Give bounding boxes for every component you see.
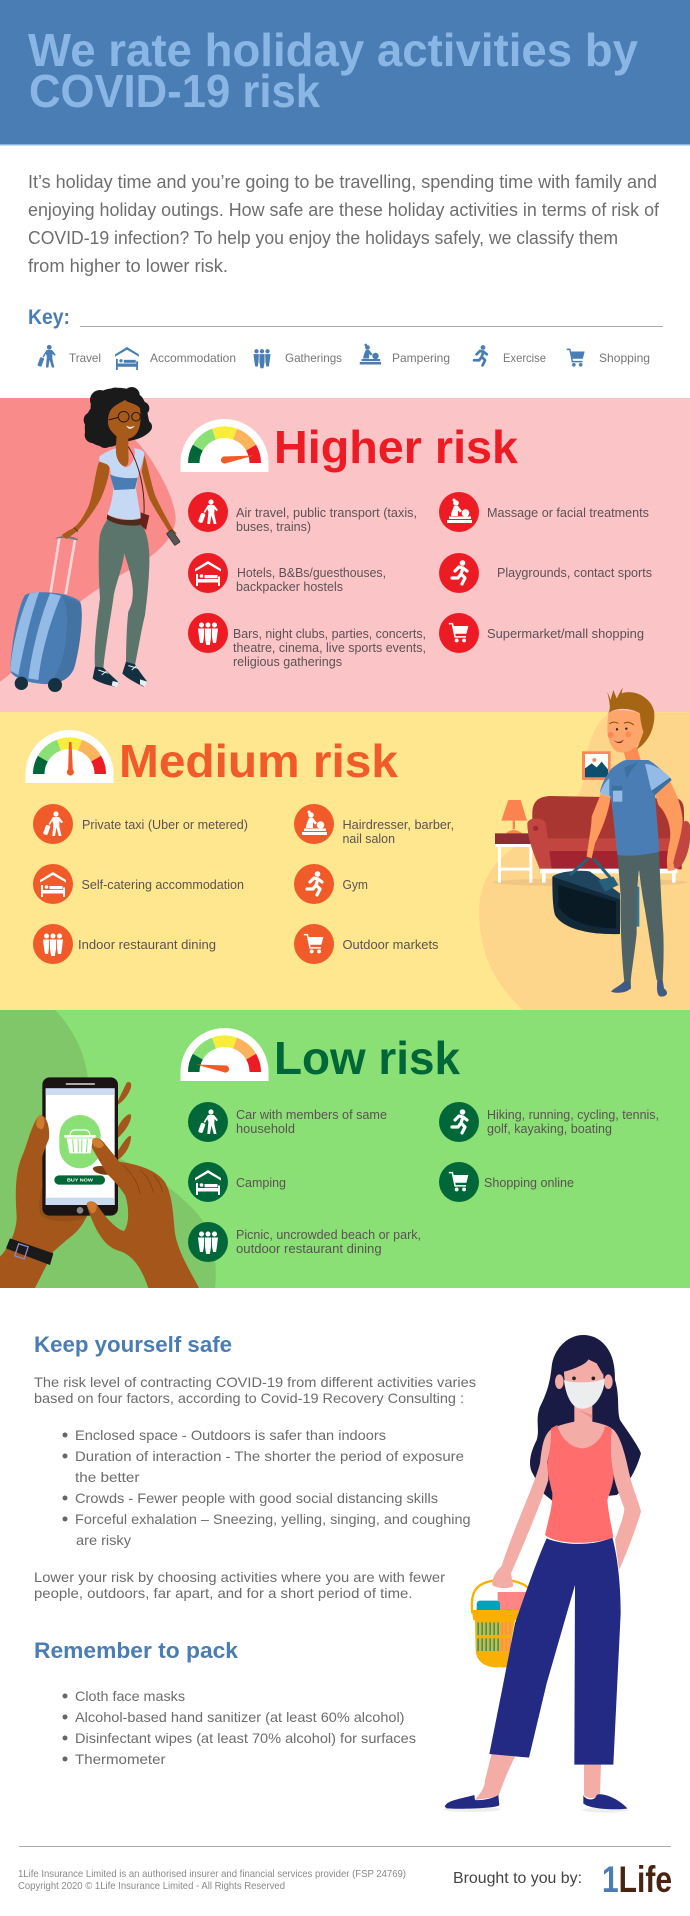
heading: low risk: Low risk (274, 1032, 460, 1084)
bullet list: risk factors: Forceful exhalation – Sneezing, yelling, singing, and coughing (75, 1511, 470, 1527)
key: gatherings (254, 349, 342, 368)
item: gym (294, 864, 368, 904)
item: shopping online (439, 1162, 574, 1202)
illustration: man with bag and sofa (479, 687, 690, 1010)
paragraph: risk factors intro (34, 1374, 476, 1406)
heading: keep yourself safe: Keep yourself safe (34, 1332, 232, 1357)
key: exercise (474, 345, 546, 365)
item: hairdresser: Hairdresser, barber, (342, 818, 454, 832)
bullet list: packing: Cloth face masks (75, 1688, 185, 1704)
gauge: low risk (180, 1028, 268, 1081)
intro paragraph: COVID-19 infection? To help you enjoy the holidays safely, we classify them (28, 228, 618, 248)
key: accommodation (115, 347, 236, 370)
paragraph: lower your risk (34, 1569, 445, 1601)
key: travel (37, 345, 101, 368)
header banner (0, 0, 690, 146)
phone button label: BUY NOW (67, 1178, 93, 1184)
item: self-catering: Self-catering accommodation (82, 878, 244, 892)
key: accommodation: Accommodation (150, 351, 236, 365)
item: air travel: buses, trains) (236, 520, 311, 534)
item: indoor dining: Indoor restaurant dining (78, 938, 216, 952)
item: hairdresser (294, 804, 454, 846)
bullet list: risk factors: the better (75, 1469, 140, 1485)
heading: remember to pack: Remember to pack (34, 1638, 239, 1663)
gauge: higher risk (180, 419, 268, 472)
item: shopping online: Shopping online (484, 1176, 574, 1190)
item: picnic: Picnic, uncrowded beach or park, (236, 1228, 421, 1242)
item: private taxi (33, 804, 248, 844)
item: camping (188, 1162, 286, 1202)
title: We rate holiday activities by (28, 24, 638, 76)
footer (18, 1846, 672, 1900)
item: bars: Bars, night clubs, parties, concerts, (233, 627, 426, 641)
legal text: Copyright 2020 © 1Life Insurance Limited - All Rights Reserved (18, 1880, 285, 1892)
title: COVID-19 risk (29, 65, 320, 117)
item: camping: Camping (236, 1176, 286, 1190)
intro paragraph: It’s holiday time and you’re going to be travelling, spending time with family and (28, 172, 657, 192)
key (28, 306, 663, 370)
item: supermarket (439, 613, 644, 653)
title (28, 24, 638, 117)
item: hotels: Hotels, B&Bs/guesthouses, (237, 566, 386, 580)
panel: medium risk (0, 687, 690, 1010)
bullet list: risk factors: Duration of interaction - The shorter the period of exposure (75, 1448, 464, 1464)
paragraph: risk factors intro: The risk level of contracting COVID-19 from different activities varies (34, 1374, 476, 1390)
bullet list: risk factors: Enclosed space - Outdoors is safer than indoors (75, 1427, 386, 1443)
paragraph: risk factors intro: based on four factors, according to Covid-19 Recovery Consulting : (34, 1390, 464, 1406)
key: shopping (567, 349, 650, 367)
legal text (18, 1868, 406, 1892)
item: hotels (188, 553, 386, 594)
item: hiking (439, 1102, 659, 1142)
key heading: Key: (28, 306, 70, 329)
item: outdoor markets: Outdoor markets (342, 938, 438, 952)
item: bars: theatre, cinema, live sports events, (233, 641, 426, 655)
intro paragraph (28, 172, 660, 276)
item: hairdresser: nail salon (342, 832, 395, 846)
panel: higher risk (0, 387, 690, 712)
item: private taxi: Private taxi (Uber or metered) (82, 818, 248, 832)
bullet list: packing: Disinfectant wipes (at least 70% alcohol) for surfaces (75, 1730, 416, 1746)
item: air travel (188, 492, 417, 534)
key: gatherings: Gatherings (285, 351, 342, 365)
bullet list: risk factors (62, 1427, 470, 1548)
bullet list: risk factors: Crowds - Fewer people with good social distancing skills (75, 1490, 438, 1506)
item: indoor dining (33, 924, 216, 964)
illustration: woman with mask and basket (443, 1335, 641, 1813)
paragraph: lower your risk: Lower your risk by choosing activities where you are with fewer (34, 1569, 445, 1585)
key: travel: Travel (69, 351, 101, 365)
bullet list: packing (62, 1688, 416, 1767)
key: pampering (360, 344, 450, 365)
item: car: Car with members of same (236, 1108, 387, 1122)
key: pampering: Pampering (392, 351, 450, 365)
item: hiking: Hiking, running, cycling, tennis, (487, 1108, 659, 1122)
illustration: hands with phone (0, 1010, 216, 1288)
section: keep yourself safe (34, 1332, 476, 1601)
item: car (188, 1102, 387, 1142)
bullet list: risk factors: are risky (76, 1532, 131, 1548)
intro paragraph: from higher to lower risk. (28, 256, 228, 276)
item: bars: religious gatherings (233, 655, 342, 669)
item: supermarket: Supermarket/mall shopping (487, 627, 644, 641)
item: playgrounds (439, 553, 652, 593)
item: hiking: golf, kayaking, boating (487, 1122, 612, 1136)
heading: medium risk: Medium risk (119, 735, 398, 787)
item: hotels: backpacker hostels (236, 580, 343, 594)
item: playgrounds: Playgrounds, contact sports (497, 566, 652, 580)
logo: 1Life: 1Life (602, 1859, 672, 1900)
heading: higher risk: Higher risk (274, 421, 518, 473)
gauge: medium risk (26, 730, 114, 783)
section: remember to pack (34, 1638, 416, 1767)
item: air travel: Air travel, public transport (taxis, (236, 506, 417, 520)
key: shopping: Shopping (599, 351, 650, 365)
bullet list: packing: Thermometer (75, 1751, 166, 1767)
panel: low risk (0, 1010, 690, 1288)
bullet list: packing: Alcohol-based hand sanitizer (at least 60% alcohol) (75, 1709, 404, 1725)
item: massage (439, 492, 649, 532)
legal text: 1Life Insurance Limited is an authorised insurer and financial services provider (FSP 24769) (18, 1868, 406, 1880)
illustration: woman with suitcase (0, 387, 180, 692)
intro paragraph: enjoying holiday outings. How safe are these holiday activities in terms of risk of (28, 200, 660, 220)
key: exercise: Exercise (503, 351, 546, 365)
item: car: household (236, 1122, 295, 1136)
item: self-catering (33, 864, 244, 904)
brought to you by: Brought to you by: (453, 1870, 582, 1887)
paragraph: lower your risk: people, outdoors, far apart, and for a short period of time. (34, 1585, 413, 1601)
item: bars (188, 613, 426, 669)
item: picnic (188, 1222, 421, 1262)
item: massage: Massage or facial treatments (487, 506, 649, 520)
item: picnic: outdoor restaurant dining (236, 1242, 382, 1256)
item: gym: Gym (342, 878, 368, 892)
item: outdoor markets (294, 924, 438, 964)
